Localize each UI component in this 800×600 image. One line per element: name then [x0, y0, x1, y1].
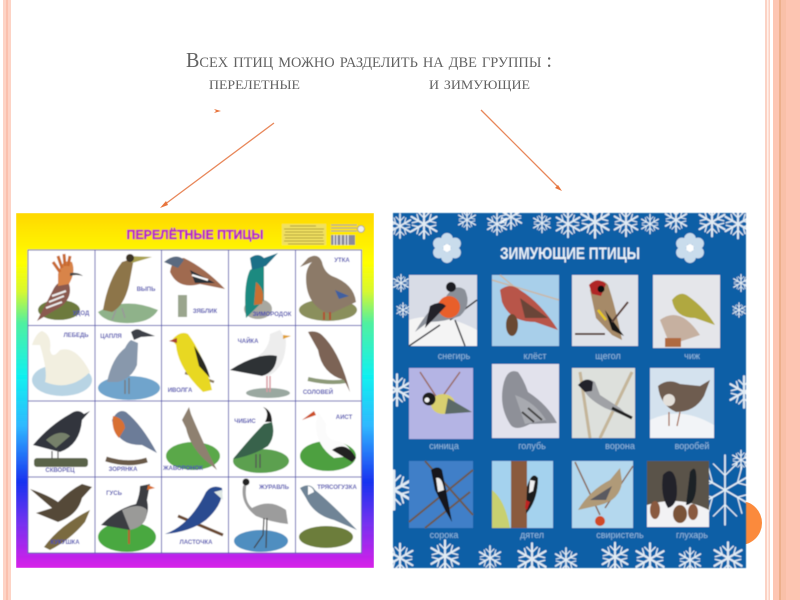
photo captions: глухарь — [676, 530, 708, 540]
bird: chaffinch — [164, 256, 225, 317]
bird: wagtail — [299, 485, 357, 548]
photo: bullfinch — [409, 275, 477, 346]
photo captions: щегол — [595, 351, 621, 361]
bird cards grid — [28, 250, 362, 553]
photo: siskin — [653, 275, 720, 348]
bird name labels: СКВОРЕЦ — [45, 468, 75, 474]
bird: kingfisher — [244, 253, 278, 319]
photo captions: чиж — [684, 351, 700, 361]
bird: cuckoo — [30, 484, 92, 550]
bird: bittern — [98, 254, 158, 323]
publisher info and barcode — [282, 224, 364, 245]
bird: stork — [300, 411, 356, 471]
bird name labels: УДОД — [73, 311, 90, 317]
photo captions: клёст — [524, 351, 546, 361]
photo: magpie — [409, 461, 473, 528]
bird name labels: ИВОЛГА — [168, 388, 193, 394]
bird: lark — [166, 407, 220, 470]
bird: goose — [98, 484, 156, 552]
subtitle: migratory: перелетные — [209, 73, 300, 93]
photo captions: синица — [429, 441, 459, 451]
poster heading: ЗИМУЮЩИЕ ПТИЦЫ — [500, 244, 640, 263]
bird: gull — [230, 330, 291, 398]
photo: crow — [572, 368, 635, 438]
arrow to wintering birds poster — [481, 110, 562, 191]
panel: migratory birds poster — [16, 213, 374, 568]
bird name labels: АИСТ — [336, 415, 353, 421]
bird: swan — [32, 331, 92, 396]
photo captions — [429, 351, 709, 540]
photo: sparrow — [650, 368, 714, 438]
bird name labels: ЖУРАВЛЬ — [258, 485, 290, 491]
bird name labels: ЧАЙКА — [238, 337, 259, 345]
bird name labels — [45, 258, 357, 546]
title: Всех птиц можно разделить на две группы : — [186, 48, 552, 72]
small arrow mark — [214, 109, 221, 113]
photo captions: свиристель — [596, 530, 644, 540]
bird name labels: КУКУШКА — [50, 540, 80, 546]
photo captions: ворона — [605, 441, 635, 451]
bird: heron — [98, 329, 160, 400]
bird name labels: ВЫПЬ — [137, 287, 156, 293]
bird name labels: ЗОРЯНКА — [109, 467, 138, 473]
bird name labels: ЛЕБЕДЬ — [63, 333, 89, 339]
bird name labels: УТКА — [334, 258, 350, 264]
photo: capercaillie — [647, 461, 709, 527]
photo captions: снегирь — [438, 351, 471, 361]
bird: golden oriole — [169, 333, 214, 392]
bird: robin — [106, 411, 157, 463]
photo: pigeon — [492, 364, 559, 438]
photo: great tit — [409, 368, 473, 439]
orange circle accent — [718, 501, 762, 545]
arrow to migratory birds poster — [160, 123, 274, 208]
bird name labels: ТРЯСОГУЗКА — [317, 485, 357, 491]
right decorative band — [765, 0, 800, 600]
bird name labels: ГУСЬ — [106, 491, 123, 497]
bird name labels: ЗЯБЛИК — [193, 309, 217, 315]
subtitle: wintering: и зимующие — [429, 73, 530, 93]
bird name labels: ЛАСТОЧКА — [180, 540, 213, 546]
bird: duck — [299, 256, 357, 321]
bird: starling — [33, 411, 90, 467]
photo captions: дятел — [520, 530, 544, 540]
photo captions: воробей — [675, 441, 709, 451]
left decorative band — [3, 0, 11, 600]
poster heading: ПЕРЕЛЁТНЫЕ ПТИЦЫ — [126, 227, 264, 242]
bird name labels: СОЛОВЕЙ — [303, 388, 333, 396]
bird: crane — [234, 478, 288, 552]
bird: lapwing — [233, 407, 289, 473]
rosette snowflake right — [676, 233, 704, 263]
photo: woodpecker — [492, 461, 553, 528]
bird: swallow — [165, 487, 223, 535]
bird: hoopoe — [37, 254, 83, 321]
photo captions: голубь — [518, 441, 546, 451]
photo: waxwing — [572, 461, 633, 528]
rosette snowflake left — [433, 233, 461, 263]
bird name labels: ЧИБИС — [234, 419, 256, 425]
photo: goldfinch — [572, 275, 638, 346]
photo: crossbill — [492, 275, 559, 346]
bird name labels: ЖАВОРОНОК — [162, 466, 203, 472]
bird name labels: ЦАПЛЯ — [100, 334, 122, 340]
bird: nightingale — [308, 331, 350, 392]
photo captions: сорока — [430, 530, 458, 540]
panel: wintering birds poster — [377, 205, 758, 575]
snowflake border — [377, 205, 758, 575]
bird name labels: ЗИМОРОДОК — [253, 312, 292, 318]
